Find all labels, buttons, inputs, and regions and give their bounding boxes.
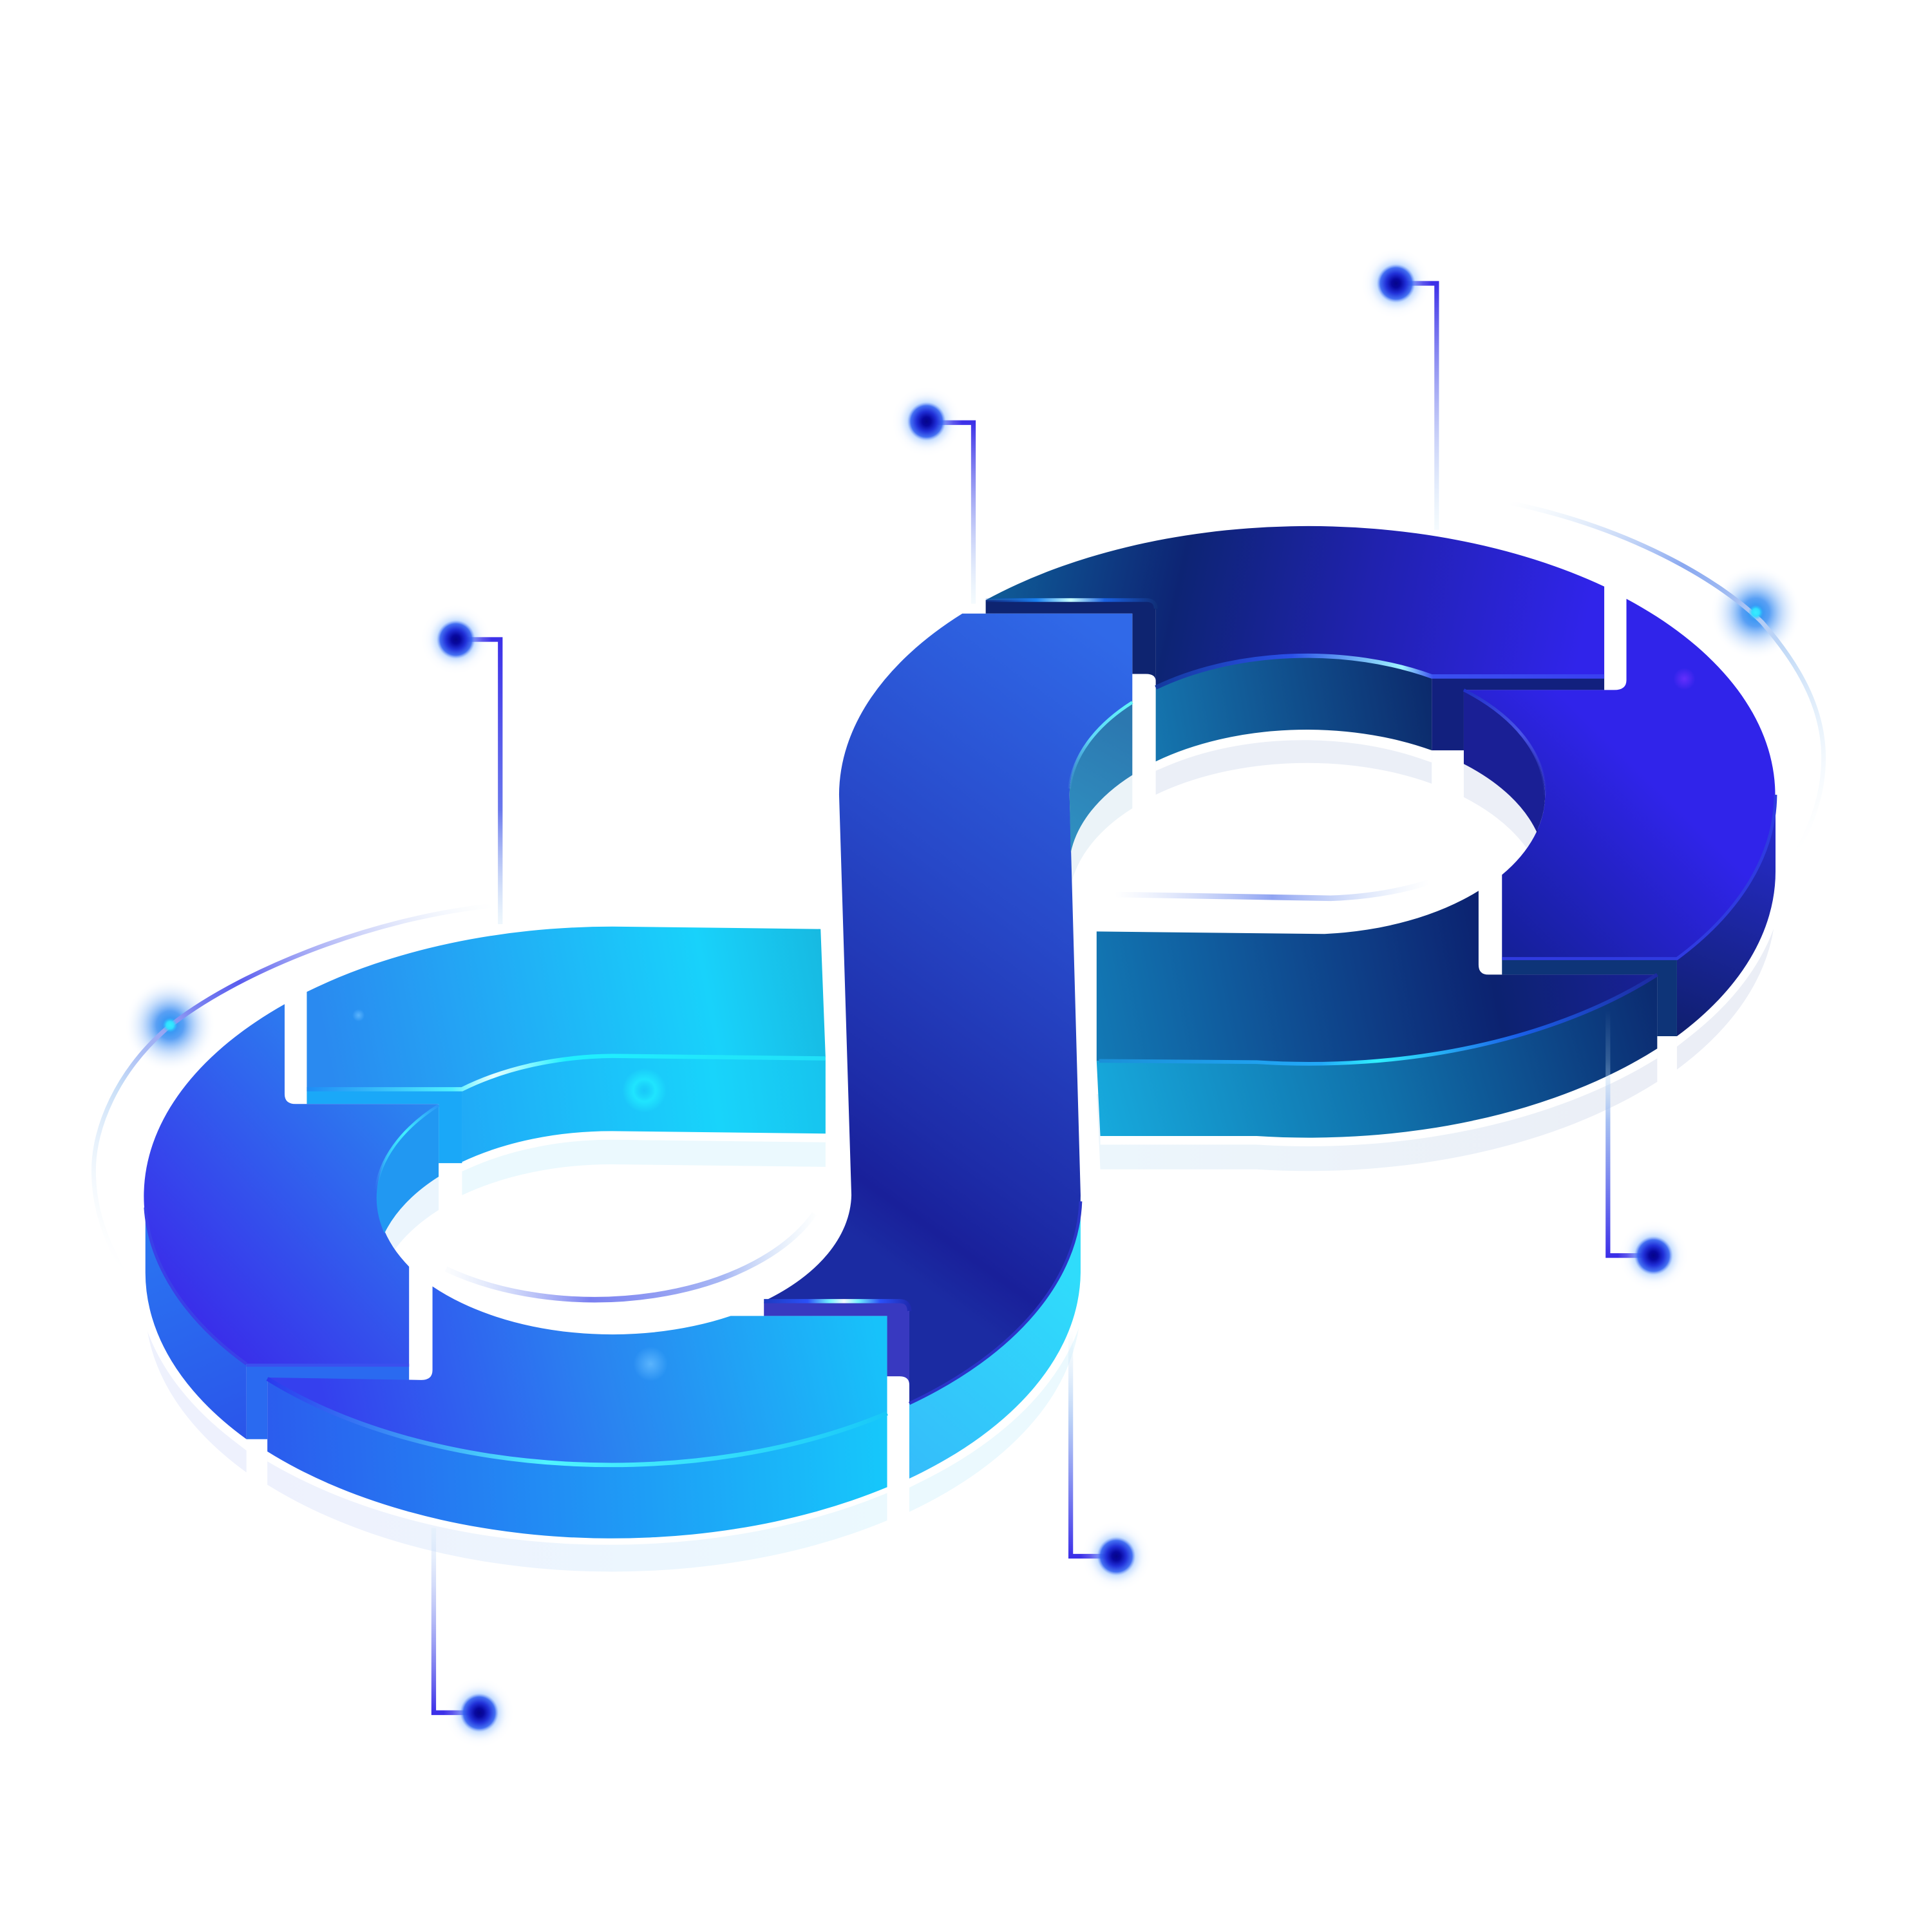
- small sparkle: front surface: [633, 1347, 668, 1381]
- glow node: right orbit: [1710, 565, 1801, 659]
- outer wall: left: [146, 1195, 247, 1439]
- connector line 1: [456, 639, 500, 924]
- inner wall: left: [377, 1104, 439, 1233]
- inner wall: back: [462, 1056, 826, 1162]
- connector block: [307, 1089, 462, 1163]
- connector line 4: [1608, 1010, 1654, 1256]
- outer wall: right: [1677, 795, 1776, 1036]
- outer wall: front: [1097, 974, 1657, 1138]
- node dot 4: [1618, 1220, 1689, 1291]
- connector line 6: [433, 1528, 479, 1712]
- white separation under the walls: [146, 676, 1776, 1536]
- glow spot: right orbit: [1748, 605, 1763, 620]
- node dot 6: [444, 1677, 515, 1748]
- inner wall sliver: [1070, 701, 1132, 853]
- connector line 3: [1396, 283, 1437, 530]
- outer wall: right side: [909, 1195, 1081, 1479]
- node dot 1: [420, 604, 491, 675]
- top surface: back arc: [307, 927, 826, 1089]
- right ring: back section: [986, 526, 1604, 761]
- node dot 5: [1081, 1520, 1152, 1592]
- dark connector block: [1432, 676, 1604, 750]
- inner wall: back: [1156, 656, 1432, 761]
- small sparkle: left top surface: [352, 1009, 365, 1021]
- outer wall: front: [267, 1378, 887, 1539]
- node dot 2: [891, 386, 962, 457]
- right ring: front section: [1097, 891, 1657, 1138]
- edge highlights: [146, 600, 1776, 1465]
- right ring: right section: [1464, 599, 1776, 1036]
- connector block under front arc: [764, 1302, 909, 1385]
- small sparkle: right surface: [1673, 668, 1696, 690]
- inner wall: right: [1464, 690, 1545, 834]
- top surface: left arc: [144, 1004, 439, 1364]
- glow node: left orbit: [124, 978, 216, 1072]
- connector line 2: [927, 422, 973, 604]
- top surface: front arc: [267, 1286, 887, 1464]
- left ring: left section: [144, 1004, 439, 1439]
- floor shadows: [146, 676, 1776, 1571]
- orbit ring: right: [1510, 503, 1824, 853]
- dark front face below back section: [986, 600, 1156, 681]
- orbit ring: left: [93, 905, 493, 1271]
- central crossing band: [764, 614, 1132, 1403]
- top surface: back arc: [986, 526, 1604, 688]
- connector block: [1502, 960, 1677, 1036]
- connector line 5: [1071, 1331, 1116, 1556]
- small ring sparkle: inner wall: [622, 1068, 667, 1113]
- top surface: front arc: [1097, 891, 1657, 1064]
- node dot 3: [1360, 248, 1432, 319]
- left ring: back section: [307, 927, 826, 1163]
- glow spot: left orbit: [163, 1018, 178, 1032]
- top surface: right arc: [1464, 599, 1776, 960]
- connector block: [247, 1364, 409, 1439]
- left ring: front section: [267, 1195, 1081, 1539]
